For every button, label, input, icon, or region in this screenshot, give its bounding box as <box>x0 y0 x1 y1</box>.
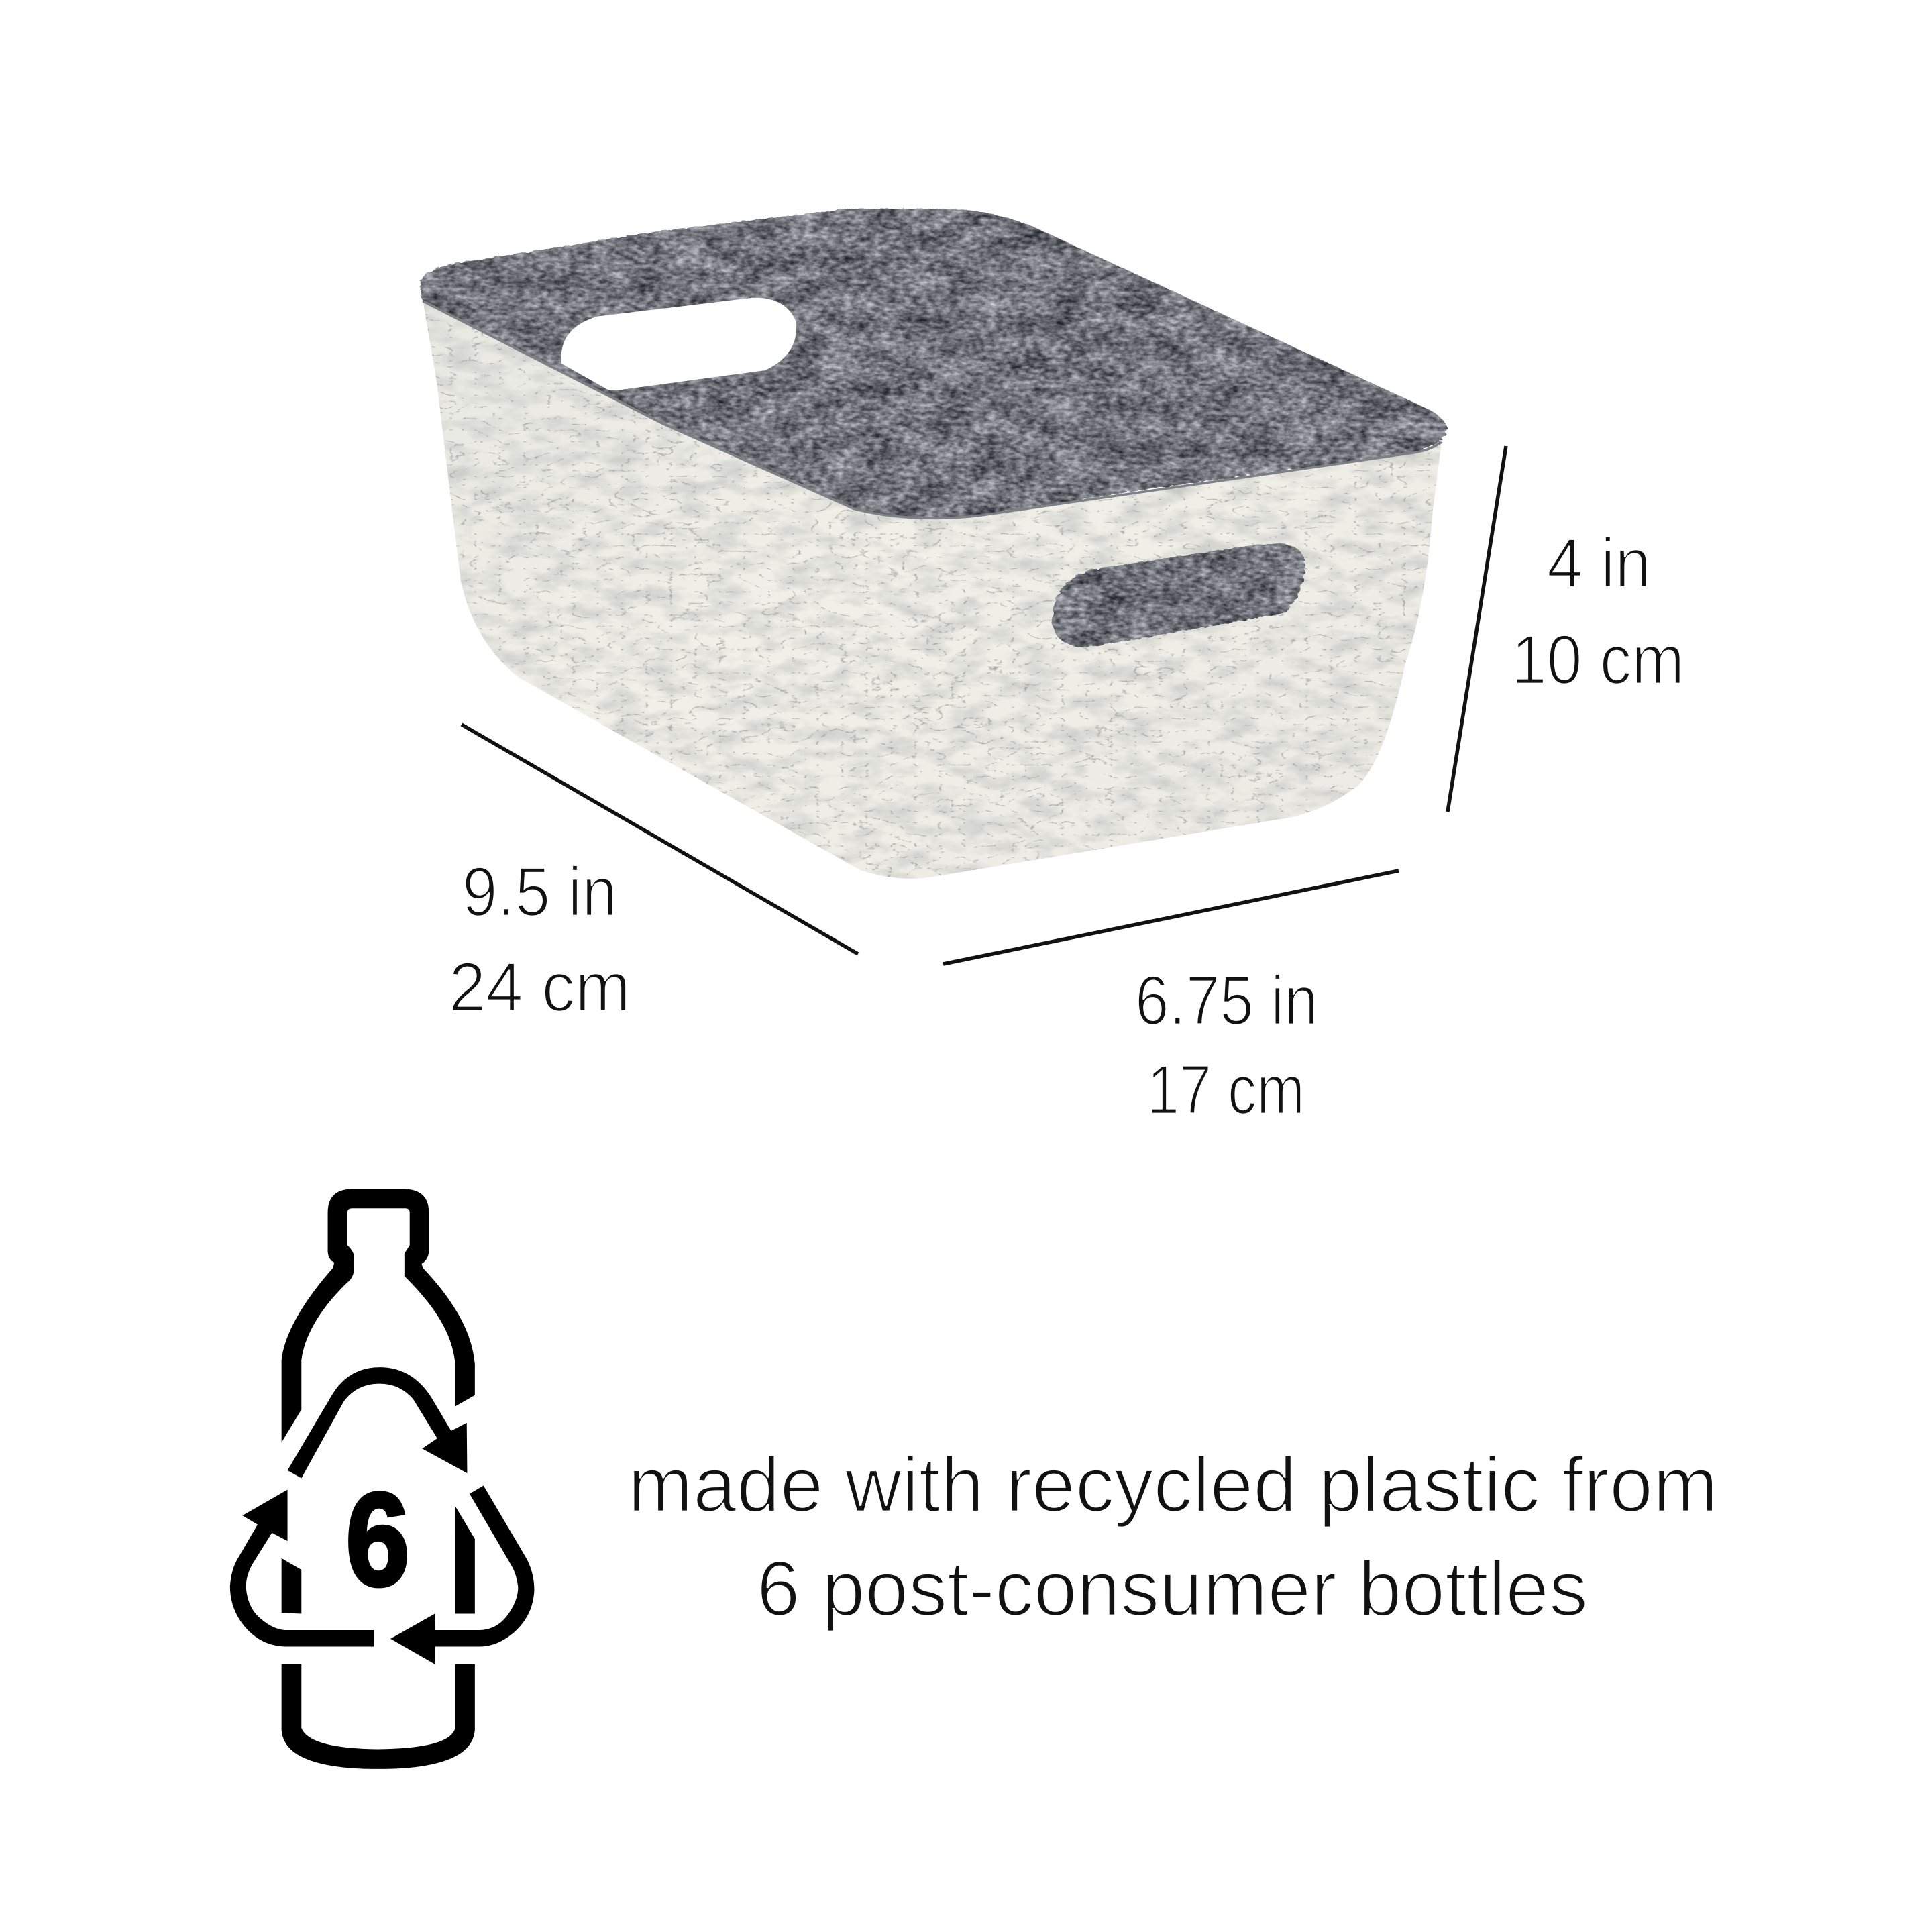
icon: recycled bottle <box>230 1189 534 1769</box>
width label: 6.75 in <box>1135 962 1318 1040</box>
bottle outline and recycling arrows <box>230 1189 534 1769</box>
height label: 10 cm <box>1511 621 1684 699</box>
front handle cutout <box>1053 543 1305 647</box>
basket outer body <box>423 301 1442 879</box>
height label: 4 in <box>1547 525 1651 602</box>
basket interior <box>420 209 1447 518</box>
number 6: 6 <box>345 1465 410 1613</box>
dimension line: height <box>1448 446 1506 812</box>
length label: 24 cm <box>449 949 631 1026</box>
back handle cutout <box>561 298 796 390</box>
basket photo <box>420 209 1447 879</box>
dimension line: length <box>462 724 858 954</box>
width label <box>1135 962 1318 1129</box>
length label: 9.5 in <box>462 853 617 931</box>
height label <box>1511 525 1684 699</box>
dimension line: width <box>943 871 1399 964</box>
basket rim edge <box>423 301 1442 518</box>
length label <box>449 853 631 1026</box>
recycled plastic caption <box>628 1441 1718 1632</box>
recycled plastic caption: 6 post-consumer bottles <box>757 1545 1588 1632</box>
recycled plastic caption: made with recycled plastic from <box>628 1441 1718 1528</box>
width label: 17 cm <box>1147 1051 1305 1129</box>
